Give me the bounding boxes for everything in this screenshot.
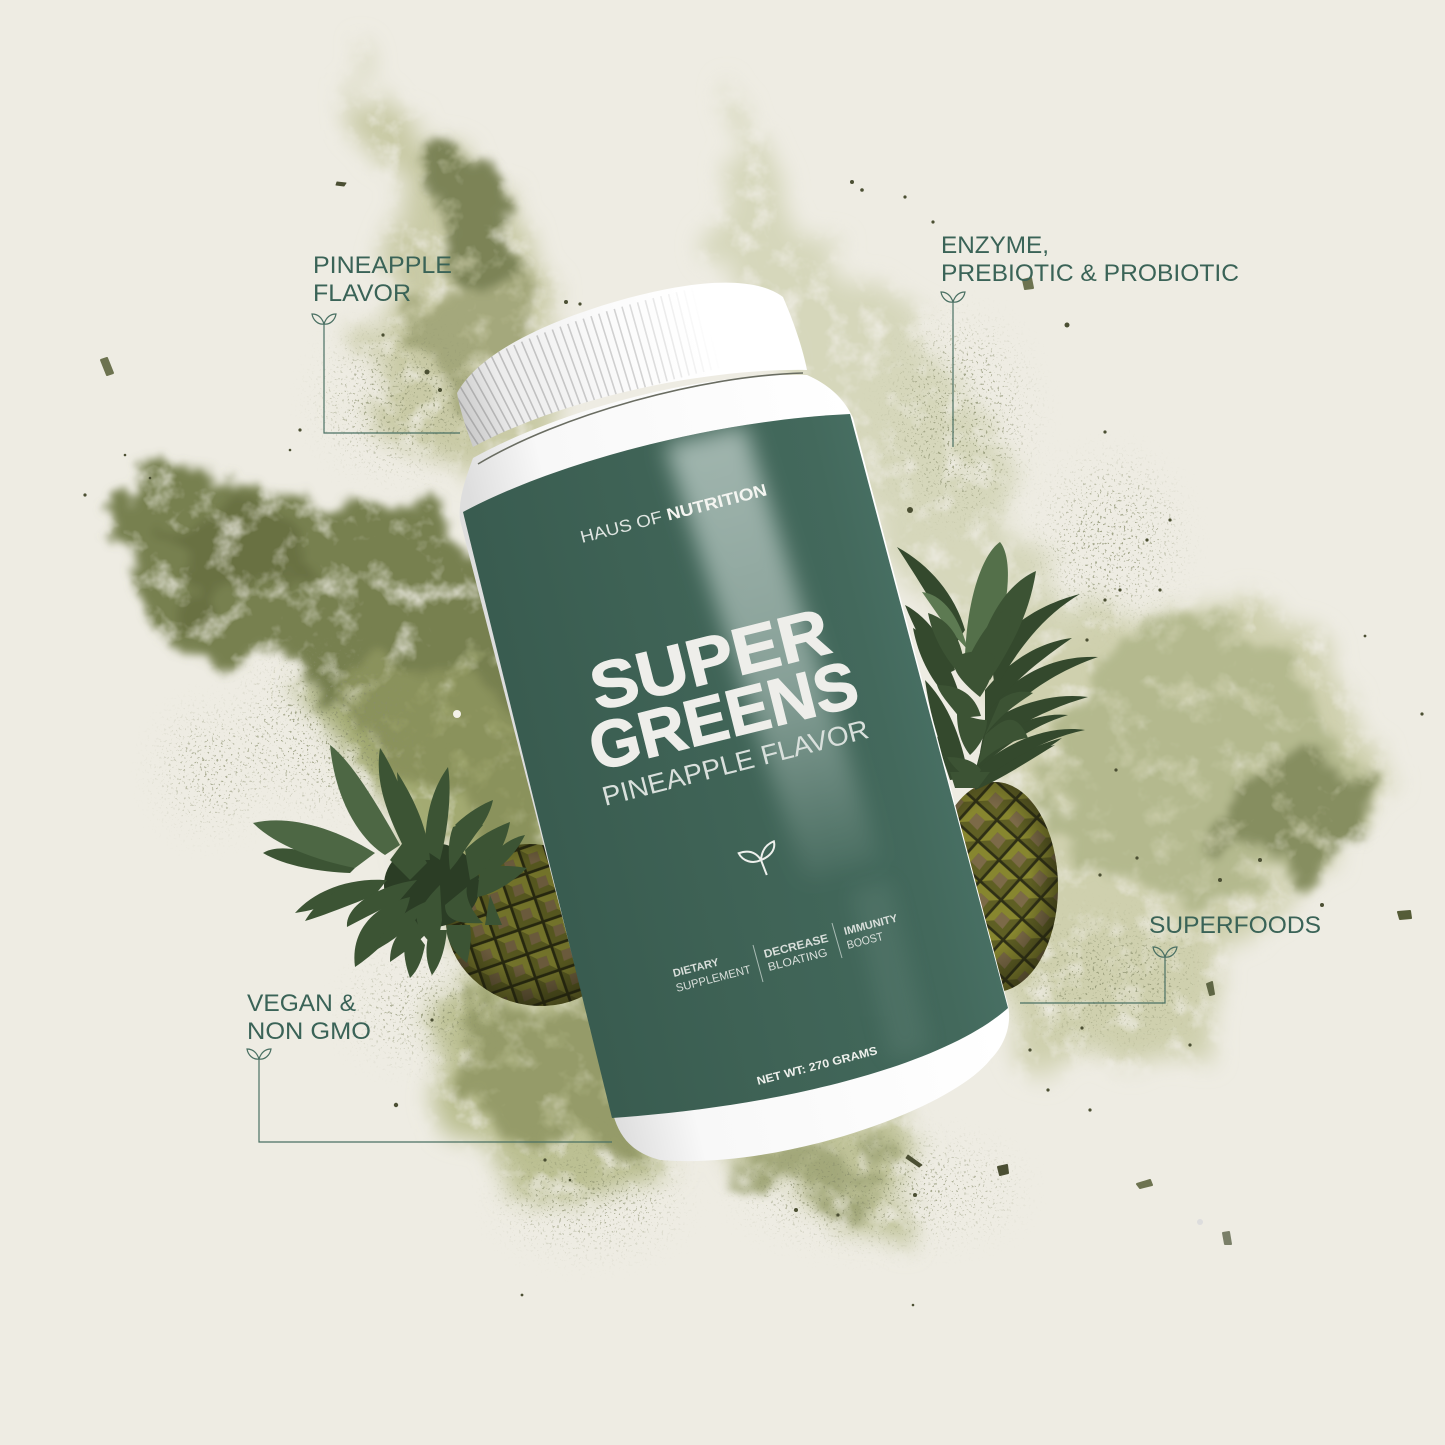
- benefit: dietary supplement: DIETARY: [672, 956, 721, 980]
- pineapple crown right: [897, 542, 1098, 790]
- callout: enzyme, prebiotic and probiotic: ENZYME,: [941, 232, 1049, 259]
- benefit: dietary supplement: SUPPLEMENT: [675, 964, 752, 995]
- pineapple body left: [425, 821, 645, 1029]
- benefit: decrease bloating: BLOATING: [767, 947, 829, 974]
- pineapple: left, behind bottle: [253, 745, 645, 1029]
- net weight: NET WT: 270 GRAMS: [756, 1045, 879, 1088]
- powder particles: [83, 180, 1424, 1306]
- callout: superfoods: SUPERFOODS: [1149, 912, 1321, 939]
- powder: mid and dark cloud bodies: [100, 150, 1400, 1205]
- callout: pineapple flavor: FLAVOR: [313, 280, 411, 307]
- bottle body: [460, 375, 1009, 1161]
- brand name: HAUS OF NUTRITION: [578, 480, 769, 547]
- callout: enzyme, prebiotic and probiotic: [941, 232, 1239, 447]
- bottle label: GREENS: [581, 646, 865, 785]
- benefit: decrease bloating: [763, 933, 830, 974]
- callout: pineapple flavor: PINEAPPLE: [313, 252, 452, 279]
- callout: enzyme, prebiotic and probiotic: PREBIOTIC & PROBIOTIC: [941, 260, 1239, 287]
- callout: vegan and non gmo: NON GMO: [247, 1018, 371, 1045]
- benefit: immunity boost: IMMUNITY: [843, 912, 900, 938]
- powder explosion clouds: [100, 60, 1400, 1240]
- callout: vegan and non gmo: VEGAN &: [247, 990, 356, 1017]
- benefit: immunity boost: BOOST: [846, 931, 885, 952]
- icon: label sprout: [738, 841, 781, 880]
- pineapple: right, behind bottle: [897, 542, 1098, 992]
- bottle cap: [455, 283, 807, 447]
- benefit: immunity boost: [843, 912, 900, 952]
- powder: light haze: [300, 60, 1400, 1235]
- callout: vegan and non gmo: [247, 990, 612, 1142]
- callout: pineapple flavor: [312, 252, 460, 433]
- product title: SUPER: [582, 594, 837, 725]
- pineapple body right: [932, 782, 1058, 992]
- flavor line: PINEAPPLE FLAVOR: [599, 714, 872, 812]
- callout: superfoods: [1020, 912, 1321, 1003]
- pineapple crown left: [253, 745, 527, 978]
- product bottle: [455, 283, 1009, 1161]
- benefit: decrease bloating: DECREASE: [763, 933, 830, 961]
- bottle label: [463, 414, 1008, 1118]
- powder: speckle texture: [170, 330, 1190, 1240]
